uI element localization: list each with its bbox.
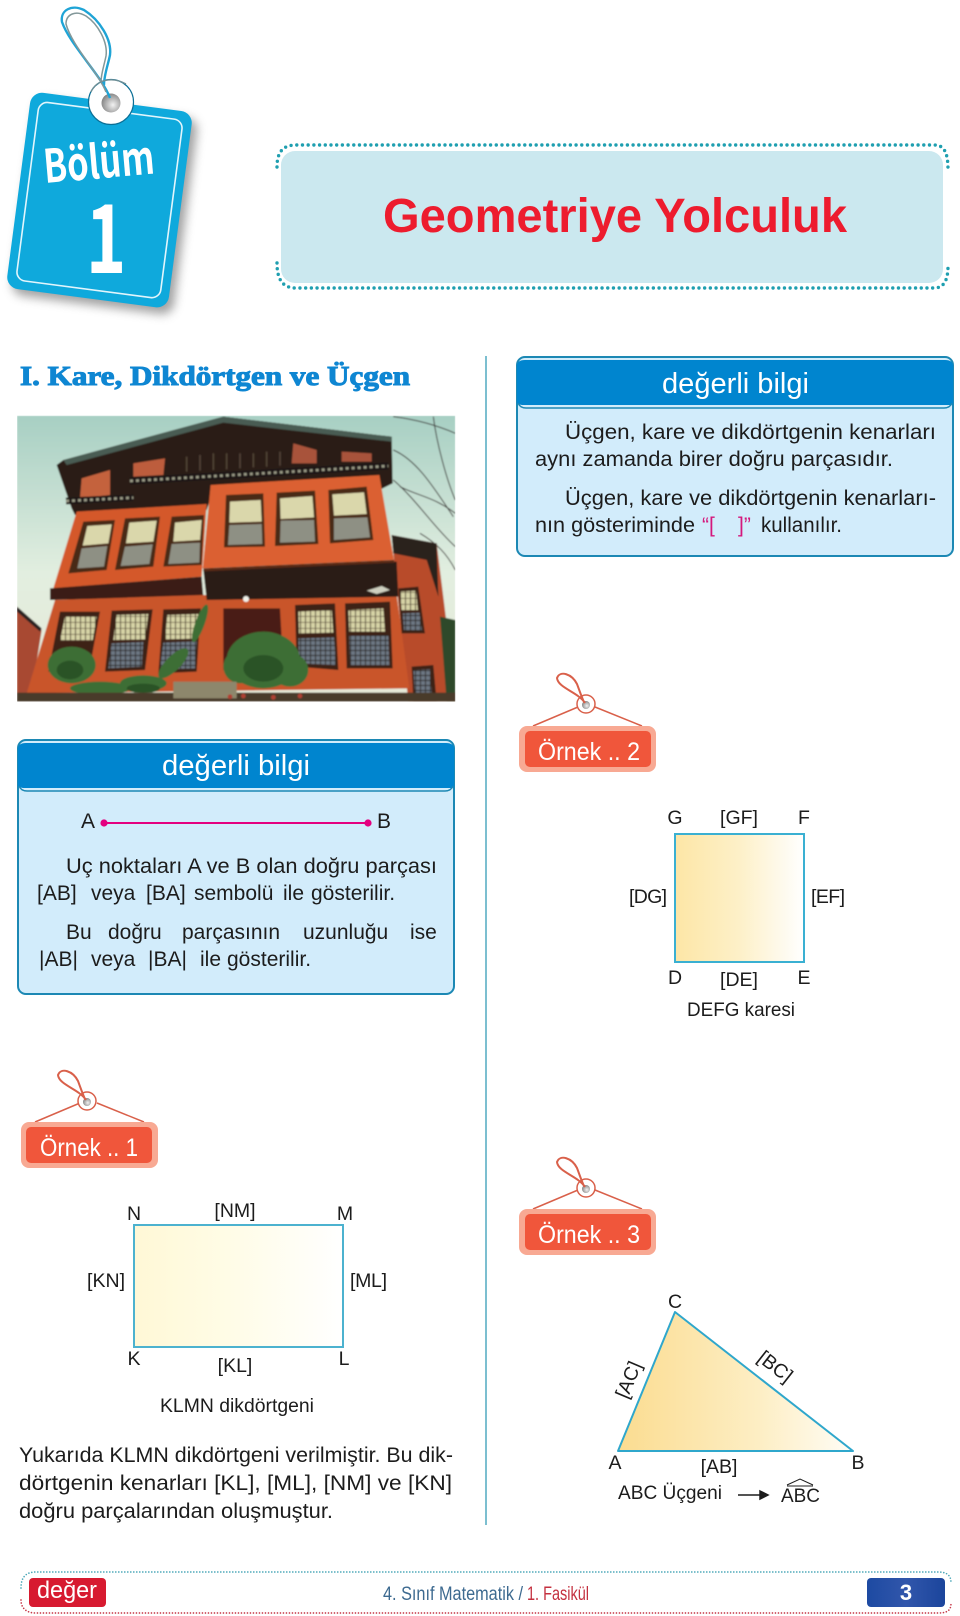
windows upper xyxy=(68,487,373,573)
box text: Bu xyxy=(66,921,92,944)
triangle ABC: [AB] xyxy=(701,1456,737,1478)
triangle ABC: A xyxy=(608,1452,622,1474)
box text: |BA| xyxy=(148,948,187,971)
box text: ile xyxy=(283,882,304,905)
box text: nın gösteriminde xyxy=(535,514,695,537)
box text: doğru xyxy=(108,921,162,944)
triangle ABC: C xyxy=(668,1291,682,1313)
chapter tag: Bölüm 1: 1 xyxy=(86,163,126,301)
box text: ]” xyxy=(738,514,751,537)
square DEFG: [GF] xyxy=(720,807,758,829)
page number xyxy=(867,1578,945,1607)
box text: [BA] xyxy=(146,882,186,905)
square DEFG: D xyxy=(668,967,682,989)
section heading: I. Kare, Dikdörtgen ve Üçgen xyxy=(20,361,410,391)
box text: kullanılır. xyxy=(761,514,842,537)
rectangle KLMN xyxy=(87,1200,387,1417)
square DEFG: F xyxy=(798,807,810,829)
line segment AB: B xyxy=(377,810,391,833)
logo: değer xyxy=(29,1578,106,1607)
chapter tag: Bölüm 1: Bölüm xyxy=(40,122,157,197)
box text: veya xyxy=(91,948,136,971)
box text: “[ xyxy=(702,514,715,537)
triangle ABC: ABC xyxy=(781,1485,820,1507)
box text: [AB] xyxy=(37,882,77,905)
triangle ABC: [BC] xyxy=(753,1347,797,1387)
badge: Örnek 1: Örnek .. 1 xyxy=(40,1134,138,1162)
triangle ABC: ABC Üçgeni xyxy=(618,1482,722,1504)
box text: veya xyxy=(91,882,136,905)
rectangle KLMN: N xyxy=(127,1203,141,1225)
box text: gösterilir. xyxy=(311,882,395,905)
footer: değer xyxy=(37,1577,97,1604)
footer: 1. Fasikül xyxy=(527,1584,589,1605)
square DEFG: DEFG karesi xyxy=(687,999,795,1021)
rectangle KLMN: L xyxy=(339,1348,350,1370)
box text xyxy=(535,421,936,537)
explanation text: doğru parçalarından oluşmuştur. xyxy=(19,1500,333,1523)
rectangle KLMN: M xyxy=(337,1203,353,1225)
square DEFG: [EF] xyxy=(811,886,845,908)
badge: Örnek 1 xyxy=(21,1071,158,1168)
box text: Üçgen, kare ve dikdörtgenin kenarları xyxy=(565,421,936,444)
box heading: değerli bilgi xyxy=(662,368,809,400)
line segment AB: A xyxy=(81,810,95,833)
title text: Geometriye Yolculuk xyxy=(383,190,847,243)
badge: Örnek 3 xyxy=(519,1158,656,1255)
square DEFG: [DE] xyxy=(720,969,758,991)
explanation text: dörtgenin kenarları [KL], [ML], [NM] ve [KN] xyxy=(19,1472,452,1495)
square DEFG xyxy=(629,807,845,1021)
badge: Örnek 2: Örnek .. 2 xyxy=(538,738,640,766)
box text: uzunluğu xyxy=(303,921,388,944)
rectangle KLMN: KLMN dikdörtgeni xyxy=(160,1395,314,1417)
explanation text: Yukarıda KLMN dikdörtgeni verilmiştir. Bu dik- xyxy=(19,1444,453,1467)
info box: line segment xyxy=(18,740,454,994)
box text: Uç noktaları A ve B olan doğru parçası xyxy=(66,855,437,878)
footer label: 4. Sınıf Matematik / xyxy=(383,1584,524,1605)
box heading: değerli bilgi xyxy=(162,750,310,782)
info box: triangle, square and rectangle sides xyxy=(517,357,953,556)
box text: |AB| xyxy=(39,948,78,971)
square DEFG: [DG] xyxy=(629,886,667,908)
box text: ise xyxy=(410,921,437,944)
triangle ABC xyxy=(608,1291,865,1507)
line segment AB xyxy=(81,810,391,833)
square DEFG: G xyxy=(667,807,683,829)
title panel xyxy=(277,145,948,288)
box text: parçasının xyxy=(182,921,280,944)
box text: Üçgen, kare ve dikdörtgenin kenarları- xyxy=(565,487,936,510)
box text xyxy=(37,855,437,971)
eave fringe xyxy=(66,498,133,501)
rectangle KLMN: K xyxy=(127,1348,141,1370)
rectangle KLMN: [NM] xyxy=(214,1200,256,1222)
square DEFG: E xyxy=(797,967,811,989)
badge: Örnek 2 xyxy=(519,674,656,772)
explanation text xyxy=(19,1444,453,1523)
badge: Örnek 3: Örnek .. 3 xyxy=(538,1221,640,1249)
rectangle KLMN: [KN] xyxy=(87,1270,125,1292)
footer: 3 xyxy=(900,1580,912,1605)
box text: ile xyxy=(200,948,221,971)
triangle ABC: [AC] xyxy=(611,1358,647,1402)
photo: Ottoman house xyxy=(17,416,455,702)
box text: sembolü xyxy=(194,882,273,905)
arrow xyxy=(738,1491,768,1499)
box text: gösterilir. xyxy=(227,948,311,971)
triangle ABC: B xyxy=(851,1452,865,1474)
box text: aynı zamanda birer doğru parçasıdır. xyxy=(535,448,893,471)
windows lower xyxy=(48,587,437,702)
column divider xyxy=(485,356,487,1525)
rectangle KLMN: [ML] xyxy=(350,1270,387,1292)
rectangle KLMN: [KL] xyxy=(218,1355,252,1377)
footer xyxy=(21,1572,951,1613)
chapter tag: Bölüm 1 xyxy=(6,8,198,316)
greenery xyxy=(48,603,308,695)
angle hat xyxy=(787,1479,813,1486)
